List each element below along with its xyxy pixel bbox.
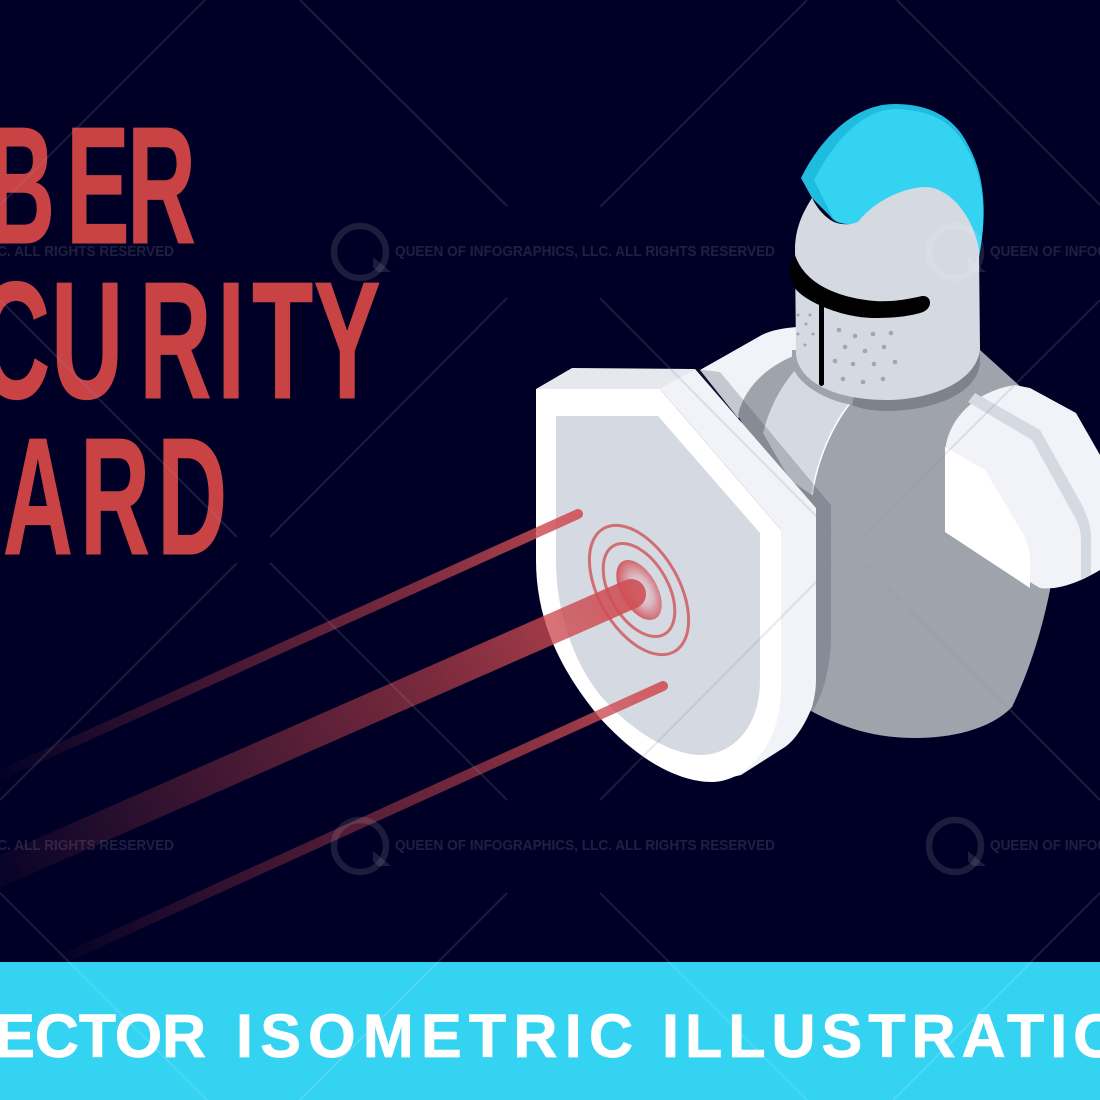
knight illustration: [536, 104, 1100, 782]
lower laser beam: [60, 686, 663, 960]
bottom banner: [0, 962, 1100, 1100]
banner text: ISOMETRIC: [236, 1002, 633, 1070]
neck shadow on chest plate: [792, 350, 858, 405]
title: cyber security guard: [0, 92, 381, 589]
shield: [536, 368, 816, 782]
banner text: [0, 1002, 1100, 1070]
helmet: [795, 187, 980, 400]
chest plate: [763, 368, 856, 495]
shield side face: [660, 369, 816, 782]
watermark text: QUEEN OF INFOGRAPHICS, LLC. ALL RIGHTS RESERVED: [395, 838, 775, 854]
torso: [738, 350, 1060, 738]
left shoulder: [700, 327, 800, 418]
shield inner face: [556, 416, 760, 755]
helmet crest: [801, 104, 984, 262]
laser beams: [0, 514, 663, 960]
shield cast shadow: [695, 369, 831, 712]
right shoulder: [945, 385, 1100, 588]
upper laser beam: [0, 514, 578, 775]
shield top face: [536, 368, 695, 390]
shield front rim: [536, 389, 781, 782]
watermark text: [0, 244, 1100, 854]
watermark logos: [334, 226, 986, 872]
watermark text: QUEEN OF INFOGRAPHICS, LLC. ALL RIGHTS RESERVED: [395, 244, 775, 260]
central laser beam: [0, 594, 631, 873]
target rings: [569, 509, 709, 671]
neck shadow: [848, 345, 980, 411]
helmet rivets: [796, 314, 897, 384]
helmet visor slit: [790, 255, 930, 386]
watermark lines on banner: [68, 962, 1032, 1100]
chest highlight: [812, 396, 856, 495]
